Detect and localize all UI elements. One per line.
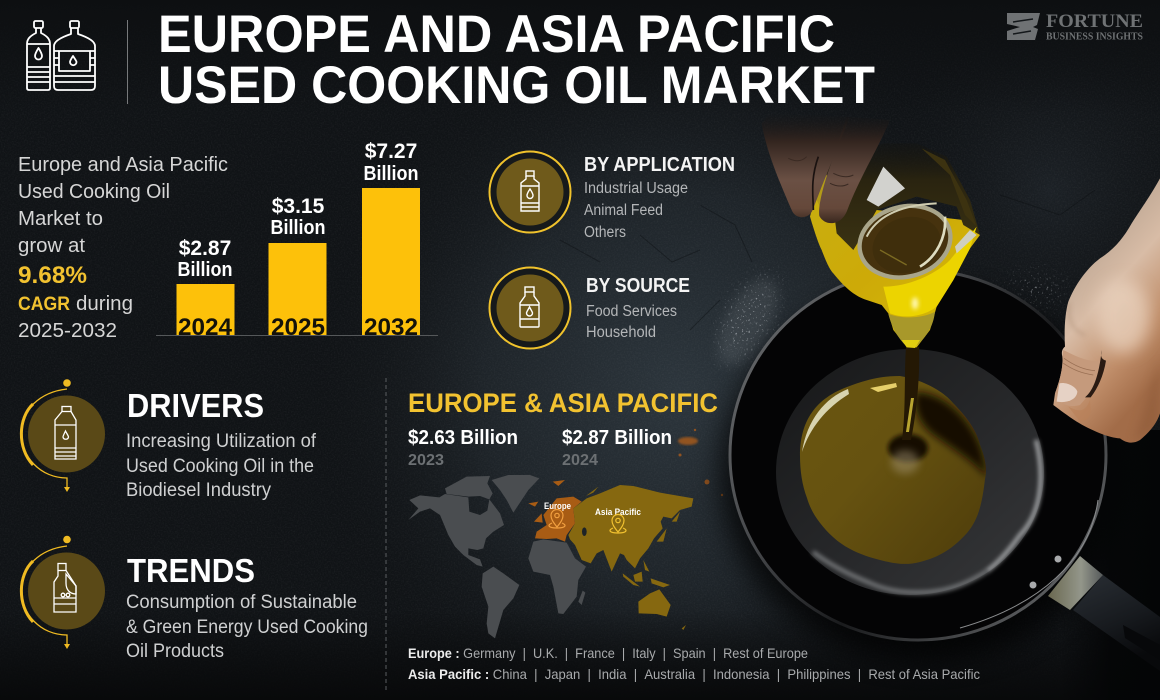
bar 2025 — [268, 195, 326, 341]
country list: Europe : Germany | U.K. | France | Italy | Spain | Rest of Europe — [408, 645, 808, 661]
photo: frying pan — [720, 113, 1160, 700]
list — [586, 303, 677, 341]
logo: Fortune Business Insights: BUSINESS INSIGHTS — [1046, 32, 1143, 42]
description — [126, 592, 368, 662]
world map — [408, 475, 693, 638]
glass jug with oil — [810, 143, 980, 348]
map label: Asia Pacific — [595, 507, 641, 533]
lower bright oil — [883, 227, 977, 316]
logo: Fortune Business Insights: FORTUNE — [1046, 11, 1143, 32]
bar 2032 — [362, 140, 420, 341]
panel: by application — [490, 152, 735, 241]
pan handle — [1048, 556, 1160, 671]
description — [126, 431, 317, 501]
icon: drivers bottle — [21, 379, 105, 492]
value 2024: 2024 — [562, 452, 598, 469]
heading: TRENDS — [127, 552, 255, 589]
bar 2025: $3.15 — [272, 195, 325, 218]
list: Food Services — [586, 303, 677, 320]
bar 2024 — [176, 237, 234, 341]
heading: DRIVERS — [127, 387, 264, 424]
map label: Europe: Europe — [544, 501, 571, 512]
text block: growth statement: 2025-2032 — [18, 320, 117, 342]
text block: growth statement: CAGR — [18, 294, 70, 315]
icon: application bottle — [490, 152, 570, 232]
heading: EUROPE & ASIA PACIFIC — [408, 388, 718, 418]
bar 2032: $7.27 — [365, 140, 417, 163]
title — [158, 5, 875, 115]
text block: growth statement: 9.68% — [18, 262, 87, 289]
list — [584, 180, 688, 241]
heading: BY SOURCE — [586, 275, 690, 297]
hand holding jug — [762, 113, 890, 223]
value 2024: $2.87 Billion — [562, 427, 672, 449]
bar 2025: Billion — [270, 217, 326, 239]
list: Household — [586, 324, 656, 341]
bar chart — [156, 140, 438, 341]
upper glass — [825, 143, 980, 250]
title: EUROPE AND ASIA PACIFIC — [158, 5, 835, 64]
panel: by source — [490, 268, 690, 348]
country list: Asia Pacific : China | Japan | India | Australia | Indonesia | Philippines | Rest of Asia Pacific — [408, 666, 980, 682]
description: Biodiesel Industry — [126, 480, 271, 501]
bar 2024: 2024 — [178, 314, 233, 341]
logo: Fortune Business Insights — [1007, 11, 1143, 42]
mouth — [852, 197, 958, 287]
description: Consumption of Sustainable — [126, 592, 357, 613]
panel: regional market — [408, 388, 980, 682]
pan body — [730, 270, 1106, 640]
description: Increasing Utilization of — [126, 431, 317, 452]
hand on pan — [1053, 178, 1160, 443]
bar 2025: 2025 — [271, 314, 325, 341]
value 2023: $2.63 Billion — [408, 427, 518, 449]
heading: BY APPLICATION — [584, 154, 735, 176]
map label: Europe — [544, 501, 571, 528]
description: Oil Products — [126, 641, 224, 662]
icon: source bottle — [490, 268, 570, 348]
icon: trends jerrycan — [21, 536, 105, 649]
panel: trends — [21, 536, 368, 662]
list: Others — [584, 224, 626, 241]
text block: growth statement: grow at — [18, 235, 85, 257]
text block: growth statement: Used Cooking Oil — [18, 181, 170, 203]
text block: growth statement — [18, 154, 228, 342]
text block: growth statement: during — [76, 293, 133, 315]
value 2023 — [408, 427, 518, 469]
bar 2032: 2032 — [364, 314, 418, 341]
description: & Green Energy Used Cooking — [126, 617, 368, 638]
bar 2024: $2.87 — [179, 237, 231, 260]
value 2023: 2023 — [408, 452, 444, 469]
bar 2032: Billion — [364, 163, 418, 185]
icon: oil bottles — [27, 21, 95, 90]
oil stream — [902, 347, 919, 440]
text block: growth statement: Europe and Asia Pacific — [18, 154, 228, 176]
value 2024 — [562, 427, 672, 469]
panel: drivers — [21, 379, 317, 501]
country list — [408, 645, 980, 682]
list: Industrial Usage — [584, 180, 688, 197]
oil puddle — [800, 376, 988, 564]
description: Used Cooking Oil in the — [126, 456, 314, 477]
map label: Asia Pacific: Asia Pacific — [595, 507, 641, 518]
list: Animal Feed — [584, 202, 663, 219]
title: USED COOKING OIL MARKET — [158, 56, 875, 115]
bar 2024: Billion — [178, 259, 232, 281]
text block: growth statement: Market to — [18, 208, 103, 230]
